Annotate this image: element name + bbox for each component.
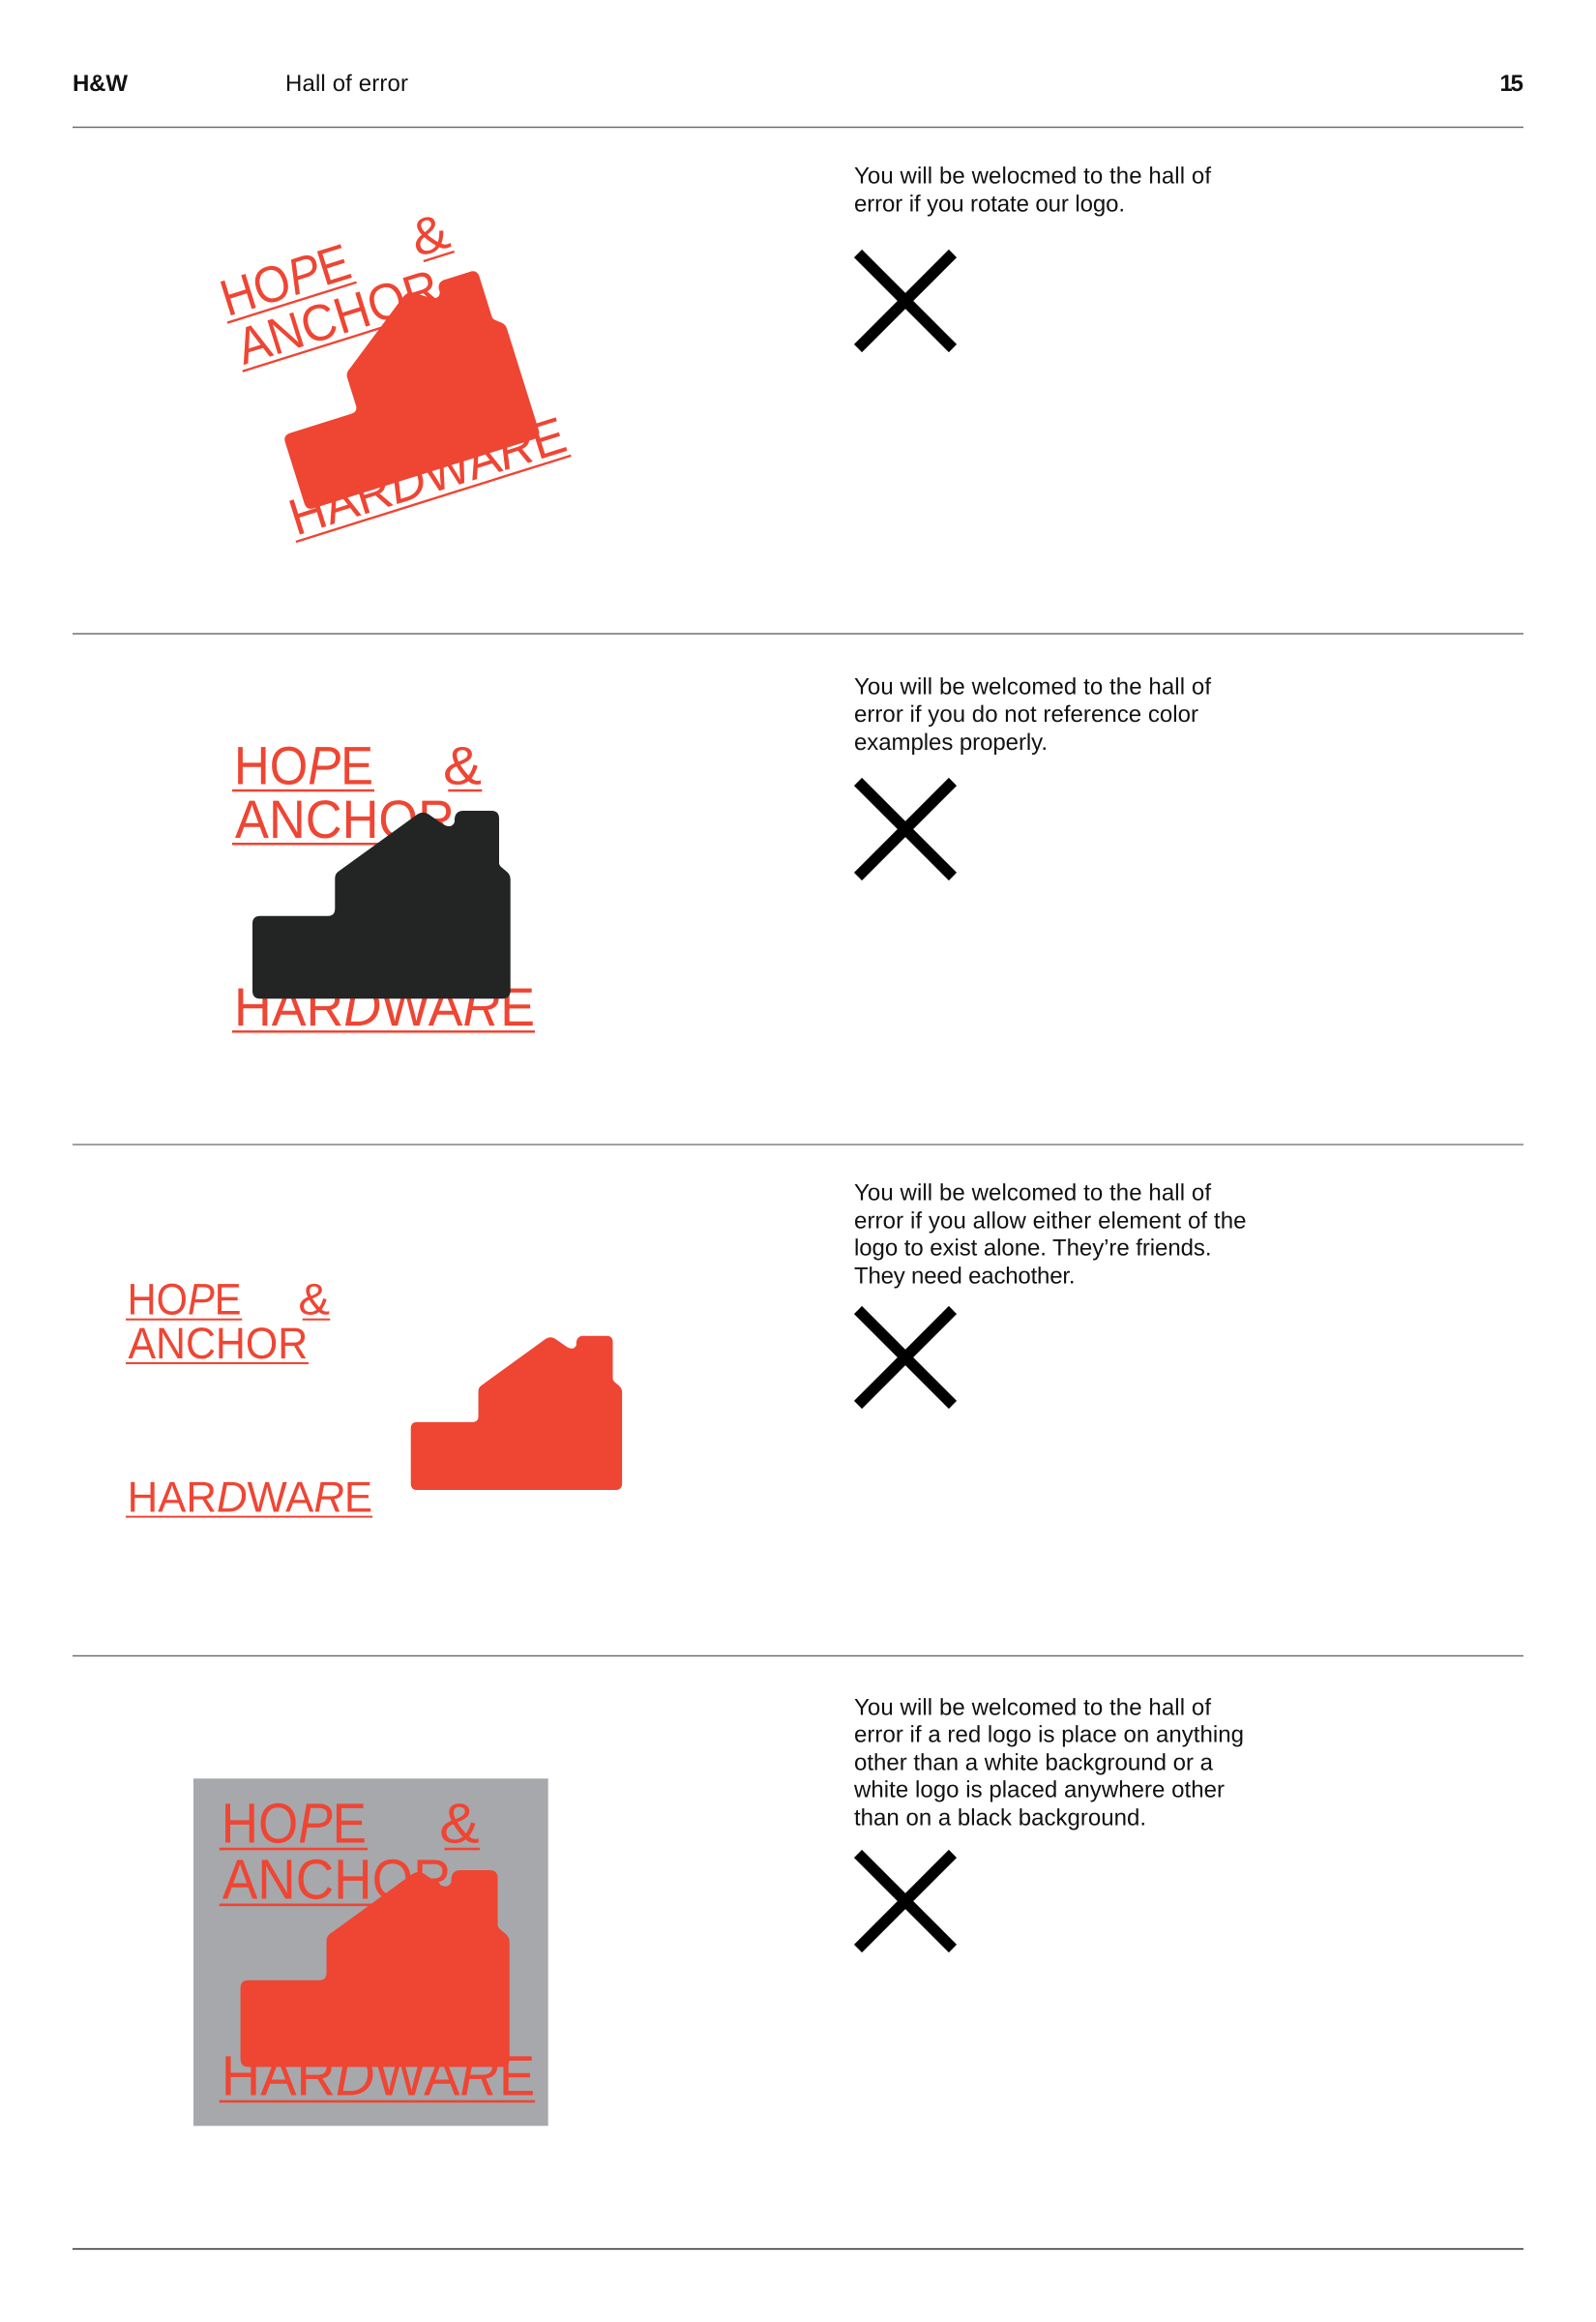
- logo wordmark top: hope and anchor: ANCHOR: [128, 1319, 308, 1368]
- logo wordmark: hope and anchor hardware: &: [439, 1792, 480, 1855]
- icon: cross mark: [858, 1310, 953, 1405]
- panel: color error caption: error if you do not reference color: [854, 701, 1198, 728]
- caption text: You will be welcomed to the hall of: [854, 1694, 1211, 1720]
- section title: Hall of error: [285, 71, 408, 97]
- logo wordmark: hope and anchor hardware: HARDWARE: [234, 977, 535, 1037]
- panel: separation error caption: error if you allow either element of the: [854, 1207, 1246, 1234]
- logo wordmark: hope and anchor hardware: &: [443, 736, 482, 796]
- logo wordmark: hope and anchor hardware: ANCHOR: [235, 789, 455, 849]
- logo house icon in black: [252, 811, 511, 998]
- panel: color error caption: examples properly.: [854, 729, 1048, 756]
- gray background square: [193, 1778, 548, 2126]
- panel: background error caption: than on a black background.: [854, 1805, 1146, 1831]
- logo house icon: [253, 266, 541, 511]
- icon: cross mark: [858, 1854, 953, 1949]
- panel: rotated error caption: error if you rotate our logo.: [854, 191, 1125, 217]
- logo on gray: [220, 1792, 535, 2107]
- logo wordmark: hope and anchor hardware: HOPE: [214, 233, 357, 327]
- logo wordmark bottom: hardware: HARDWARE: [128, 1474, 372, 1521]
- logo wordmark top: hope and anchor: &: [298, 1275, 330, 1324]
- panel: separation error caption: logo to exist alone. They’re friends.: [854, 1235, 1211, 1262]
- logo wordmark: hope and anchor hardware: [232, 736, 535, 1037]
- panel: background error caption: [853, 1694, 1244, 1949]
- logo wordmark: hope and anchor hardware: [212, 187, 573, 547]
- logo wordmark: hope and anchor hardware: [220, 1792, 535, 2107]
- panel: color error caption: [854, 674, 1211, 877]
- icon: cross mark: [858, 253, 953, 348]
- panel: background error caption: white logo is placed anywhere other: [853, 1777, 1225, 1803]
- logo wordmark: hope and anchor hardware: HOPE: [234, 736, 373, 796]
- panel: rotated logo error: [212, 187, 573, 547]
- logo wordmark: hope and anchor hardware: HARDWARE: [282, 406, 573, 547]
- logo wordmark top: hope and anchor: HOPE: [128, 1275, 241, 1324]
- caption text: You will be welcomed to the hall of: [854, 674, 1211, 700]
- icon: cross mark: [858, 782, 953, 877]
- panel: separation error caption: [854, 1180, 1246, 1405]
- caption text: You will be welcomed to the hall of: [854, 1180, 1211, 1206]
- logo wordmark top: hope and anchor: [126, 1275, 330, 1368]
- panel: separated logo elements error: [126, 1275, 622, 1521]
- page number: 15: [1499, 71, 1523, 97]
- logo wordmark: hope and anchor hardware: HARDWARE: [222, 2044, 535, 2107]
- logo house icon: [241, 1870, 510, 2067]
- caption text: You will be welocmed to the hall of: [854, 163, 1211, 189]
- logo house icon alone: [411, 1336, 622, 1490]
- panel: rotated error caption: [854, 163, 1211, 348]
- brand mark: H&W: [73, 71, 128, 97]
- logo wordmark: hope and anchor hardware: ANCHOR: [222, 1848, 452, 1911]
- panel: wrong color logo error: [232, 736, 535, 1037]
- panel: separation error caption: They need eachother.: [854, 1264, 1076, 1290]
- page header: [73, 71, 1523, 97]
- logo wordmark: hope and anchor hardware: ANCHOR: [229, 258, 446, 375]
- panel: logo on gray background error: [193, 1778, 548, 2126]
- panel: background error caption: other than a white background or a: [854, 1750, 1214, 1776]
- logo wordmark: hope and anchor hardware: HOPE: [222, 1792, 367, 1855]
- panel: background error caption: error if a red logo is place on anything: [854, 1722, 1244, 1748]
- logo wordmark: hope and anchor hardware: &: [403, 202, 456, 268]
